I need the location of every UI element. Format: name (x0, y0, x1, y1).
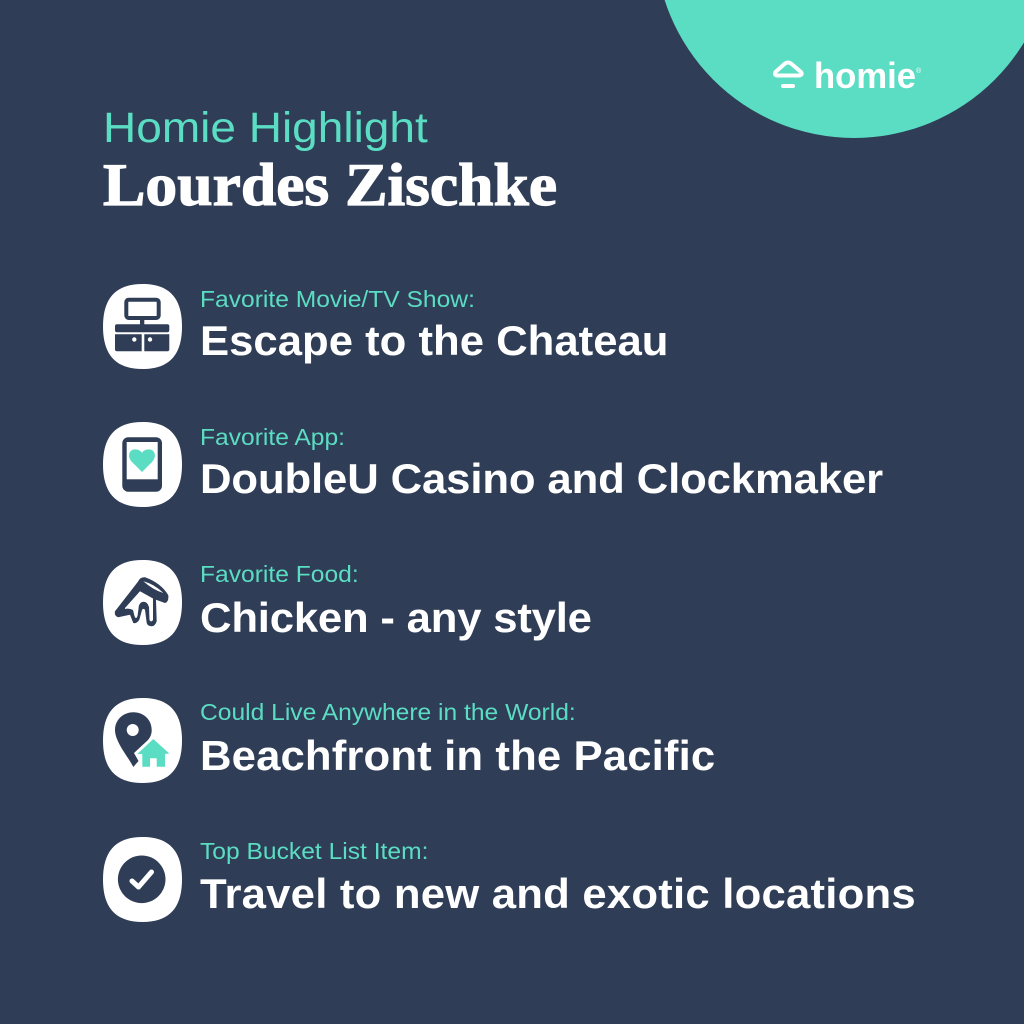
value: favorite movie: Escape to the Chateau (200, 317, 668, 364)
label: bucket list: Top Bucket List Item: (200, 838, 428, 864)
label: favorite app: Favorite App: (200, 424, 345, 450)
value: bucket list: Travel to new and exotic locations (200, 870, 916, 917)
value: favorite app: DoubleU Casino and Clockmaker (200, 455, 883, 502)
value: could live anywhere: Beachfront in the Pacific (200, 732, 715, 779)
value: favorite food: Chicken - any style (200, 594, 592, 641)
icon: TV cabinet (103, 284, 182, 369)
registered mark: ® (916, 67, 922, 75)
heading: name: Lourdes Zischke (103, 152, 557, 218)
icon: homie roof logo (775, 62, 802, 86)
label: favorite food: Favorite Food: (200, 561, 359, 587)
logo badge: teal circle with homie logo (664, 0, 1024, 138)
label: favorite movie: Favorite Movie/TV Show: (200, 286, 475, 312)
icon: map pin with house (103, 698, 182, 783)
icon: phone with heart (103, 422, 182, 507)
logo wordmark: homie (814, 55, 916, 96)
label: could live anywhere: Could Live Anywhere in the World: (200, 699, 576, 725)
icon: pizza slice (103, 560, 182, 645)
icon: check circle (103, 837, 182, 922)
heading: Homie Highlight: Homie Highlight (103, 104, 428, 152)
